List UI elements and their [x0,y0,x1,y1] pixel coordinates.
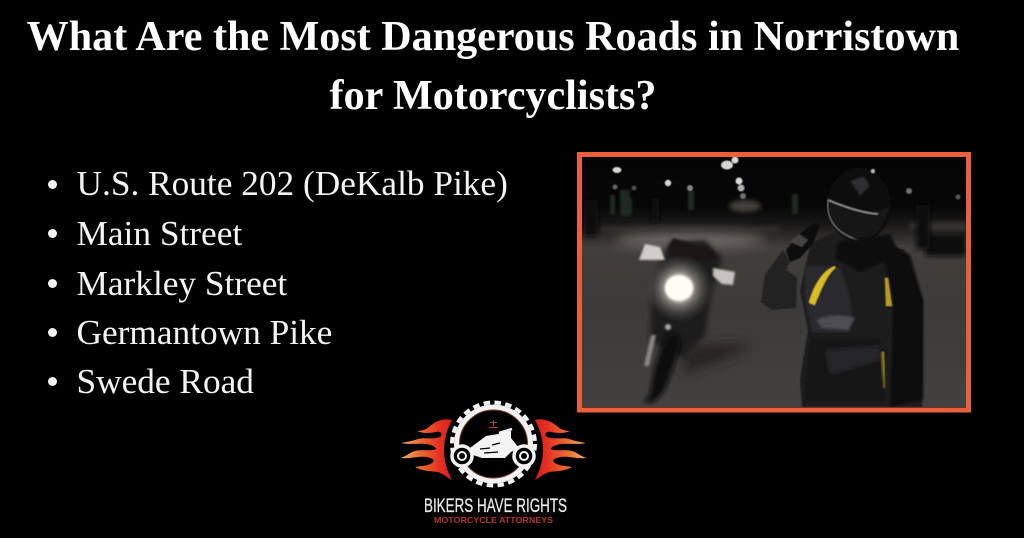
left flames [400,419,452,480]
bullet list: dangerous roads: Swede Road [76,362,254,401]
motorcycle icon [452,429,534,466]
logo tagline: MOTORCYCLE ATTORNEYS [434,516,554,525]
bullet list: dangerous roads: Markley Street [76,264,287,303]
right flames [535,419,587,480]
logo: Bikers Have Rights [400,402,587,525]
title: for Motorcyclists? [330,72,656,119]
rider [761,168,923,407]
road and background lights [584,156,966,256]
title [27,13,959,119]
logo wordmark: BIKERS HAVE RIGHTS [424,495,567,517]
motorcycle [639,238,748,403]
bullet list: dangerous roads: Main Street [76,214,242,253]
photo frame [580,154,968,410]
photo: motorcyclist at night beside motorcycle with headlight on [400,152,971,523]
bullet list: dangerous roads [48,164,508,401]
bullet list: dangerous roads: Germantown Pike [76,313,332,352]
bullet list: dangerous roads: U.S. Route 202 (DeKalb Pike) [76,164,508,203]
gear emblem [452,402,535,486]
title: What Are the Most Dangerous Roads in Norristown [27,13,959,60]
